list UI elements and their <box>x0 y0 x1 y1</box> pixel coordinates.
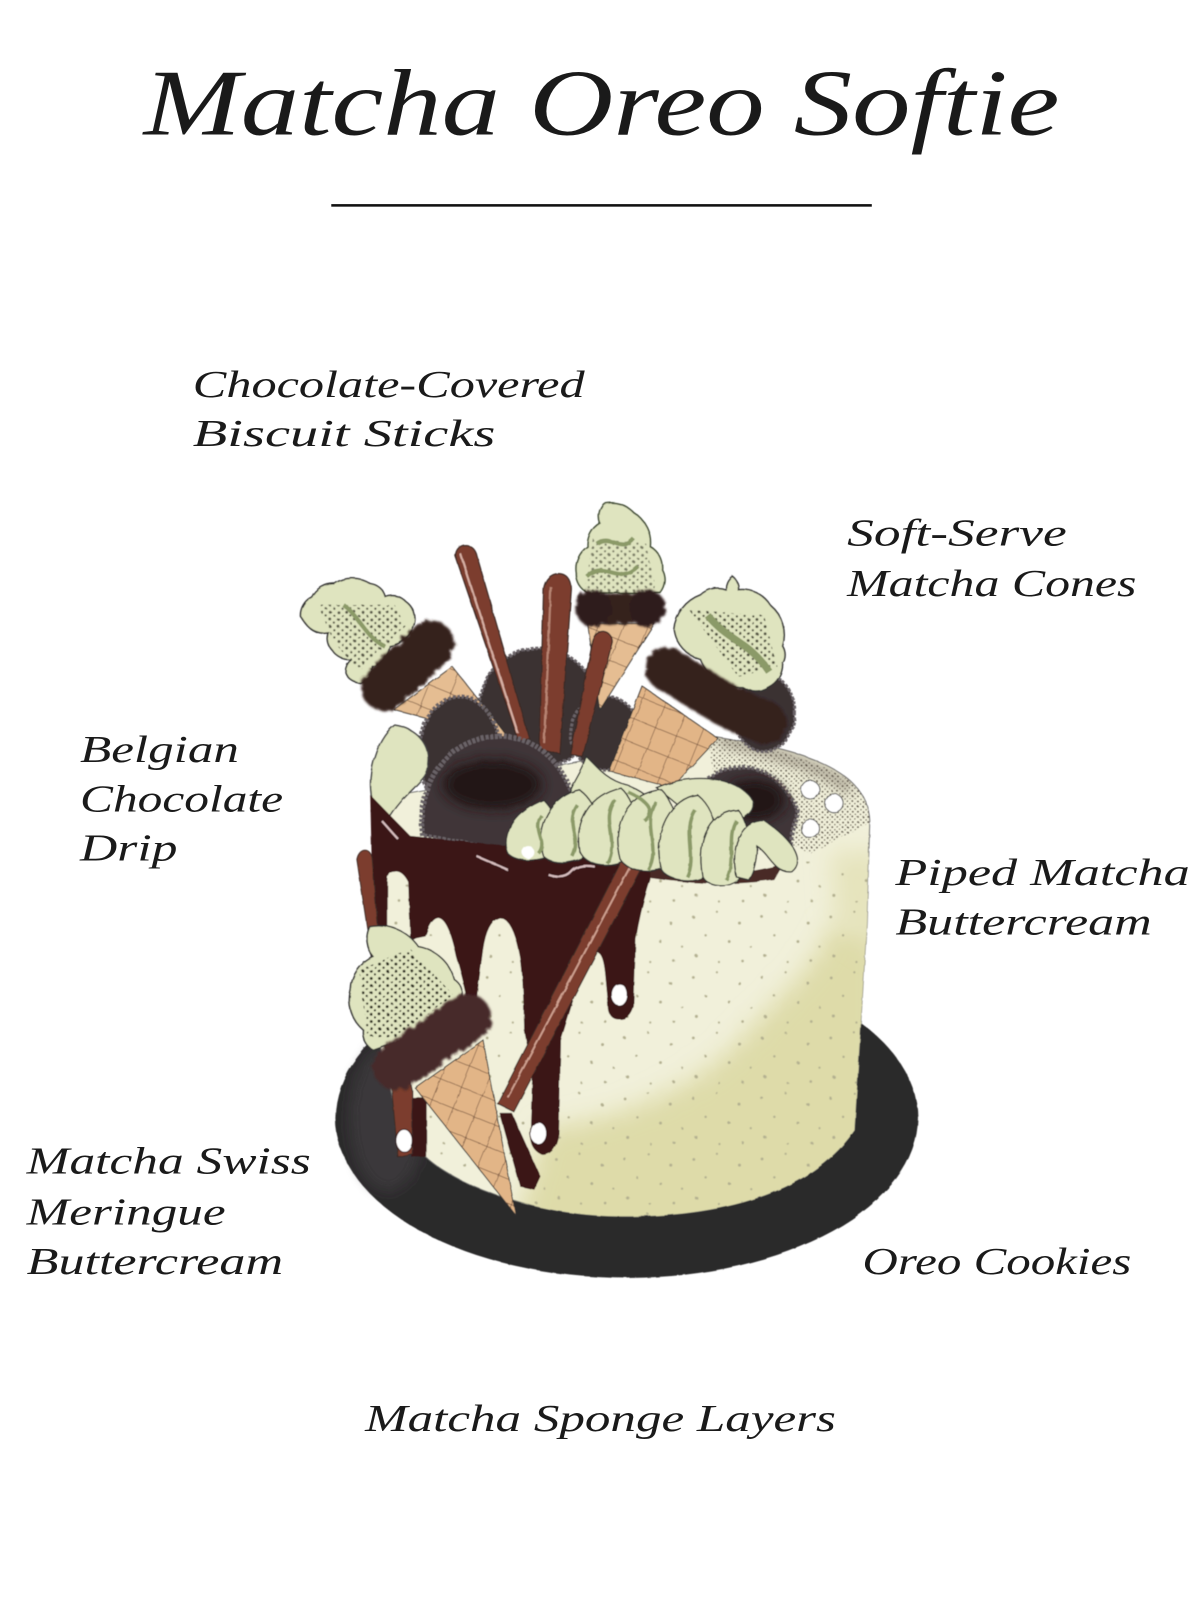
left stick <box>357 850 412 1157</box>
left buttercream mound <box>371 725 428 826</box>
label: belgian chocolate drip: Drip <box>79 828 177 870</box>
cake board <box>335 958 918 1278</box>
label: chocolate-covered biscuit sticks <box>193 364 586 455</box>
label: oreo cookies: Oreo Cookies <box>863 1241 1131 1283</box>
label: soft-serve matcha cones: Soft-Serve <box>847 513 1067 555</box>
title underline <box>331 204 872 207</box>
label: matcha swiss meringue buttercream: Buttercream <box>27 1241 283 1283</box>
label: piped matcha buttercream: Buttercream <box>895 901 1152 943</box>
back oreo cookies <box>479 648 795 770</box>
cone lower left <box>349 925 541 1215</box>
label: matcha swiss meringue buttercream <box>25 1140 311 1283</box>
label: belgian chocolate drip <box>79 729 283 870</box>
label: belgian chocolate drip: Chocolate <box>80 778 283 820</box>
front oreo cookies <box>418 696 798 851</box>
front stick <box>497 833 654 1112</box>
title: Matcha Oreo Softie <box>141 51 1059 155</box>
label: soft-serve matcha cones <box>846 513 1136 605</box>
label: piped matcha buttercream: Piped Matcha <box>894 852 1190 894</box>
label: matcha swiss meringue buttercream: Matcha Swiss <box>25 1140 311 1182</box>
cone top middle <box>575 503 666 710</box>
piped matcha buttercream <box>506 757 798 886</box>
chocolate drip <box>370 795 784 1157</box>
cone right <box>609 576 785 788</box>
label: soft-serve matcha cones: Matcha Cones <box>846 563 1136 605</box>
label: matcha sponge layers: Matcha Sponge Layers <box>364 1398 836 1440</box>
label: matcha swiss meringue buttercream: Meringue <box>25 1192 226 1234</box>
label: chocolate-covered biscuit sticks: Biscuit Sticks <box>193 413 495 455</box>
cake body <box>369 734 882 1241</box>
label: belgian chocolate drip: Belgian <box>80 729 239 771</box>
chocolate biscuit sticks <box>455 545 612 757</box>
white chocolate highlights <box>396 984 628 1152</box>
stippled top rim <box>708 734 874 853</box>
label: piped matcha buttercream <box>894 852 1190 943</box>
cake illustration <box>300 503 918 1278</box>
cone upper left <box>300 578 511 741</box>
label: chocolate-covered biscuit sticks: Chocolate-Covered <box>193 364 586 406</box>
